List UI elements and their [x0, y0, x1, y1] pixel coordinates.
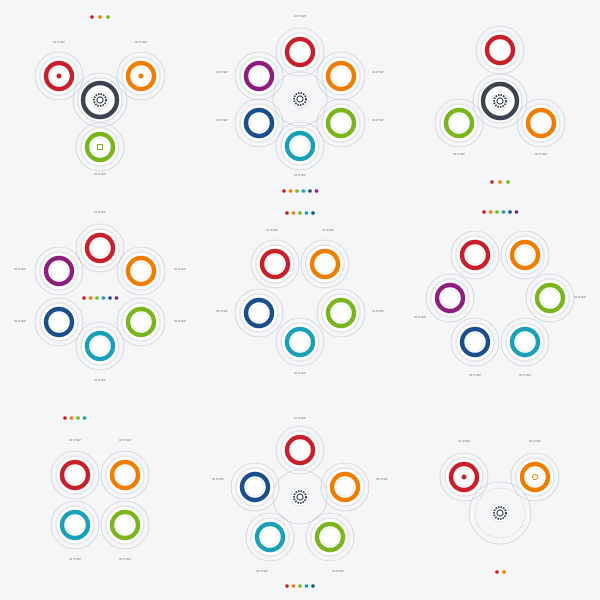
- labels: 06 STEP: [216, 70, 228, 74]
- labels: [212, 416, 388, 573]
- panel: five steps with gear: [212, 416, 388, 588]
- legend dots: [63, 416, 86, 420]
- labels: 01 STEP: [69, 438, 81, 442]
- nodes: [235, 28, 365, 170]
- labels: 04 STEP: [294, 371, 306, 375]
- labels: 03 STEP: [94, 172, 106, 176]
- labels: 02 STEP: [135, 40, 147, 44]
- labels: 04 STEP: [519, 373, 531, 377]
- panel: four steps: [51, 416, 149, 561]
- panel: six steps with gear: [216, 14, 384, 193]
- labels: [53, 40, 147, 176]
- labels: 02 STEP: [529, 439, 541, 443]
- panel: six steps ring: [14, 210, 186, 382]
- legend dots: [495, 570, 506, 574]
- labels: [414, 295, 586, 377]
- labels: 04 STEP: [69, 557, 81, 561]
- labels: [69, 438, 131, 561]
- labels: 02 STEP: [376, 477, 388, 481]
- gear hub: [73, 73, 127, 127]
- nodes: [435, 26, 565, 147]
- labels: 05 STEP: [469, 373, 481, 377]
- labels: [14, 210, 186, 382]
- legend dots: [285, 211, 315, 215]
- labels: 05 STEP: [216, 118, 228, 122]
- labels: 02 STEP: [119, 438, 131, 442]
- labels: [216, 14, 384, 177]
- gear hub: [273, 72, 327, 126]
- labels: 03 STEP: [372, 118, 384, 122]
- gear hub: [273, 470, 327, 524]
- labels: 03 STEP: [453, 152, 465, 156]
- labels: 01 STEP: [294, 416, 306, 420]
- node red: [35, 52, 83, 100]
- panel: three steps triangle: [435, 26, 565, 184]
- labels: 02 STEP: [322, 228, 334, 232]
- legend dots: [282, 189, 318, 193]
- panel: six steps wide: [414, 210, 586, 377]
- labels: 06 STEP: [414, 315, 426, 319]
- labels: 01 STEP: [294, 14, 306, 18]
- labels: 01 STEP: [266, 228, 278, 232]
- labels: 03 STEP: [119, 557, 131, 561]
- labels: [458, 439, 541, 443]
- labels: 04 STEP: [256, 569, 268, 573]
- gear hub: [469, 482, 531, 544]
- labels: 03 STEP: [332, 569, 344, 573]
- labels: 03 STEP: [174, 319, 186, 323]
- labels: 01 STEP: [53, 40, 65, 44]
- labels: 02 STEP: [372, 70, 384, 74]
- labels: [216, 228, 384, 375]
- labels: 03 STEP: [372, 309, 384, 313]
- node green: [76, 123, 124, 171]
- labels: 05 STEP: [216, 309, 228, 313]
- node orange: [117, 52, 165, 100]
- labels: 05 STEP: [14, 319, 26, 323]
- panel: five steps: [216, 211, 384, 375]
- labels: 06 STEP: [14, 267, 26, 271]
- legend dots: [490, 180, 510, 184]
- labels: 03 STEP: [574, 295, 586, 299]
- labels: 04 STEP: [294, 173, 306, 177]
- panel: three steps with gear: [35, 15, 165, 176]
- panel: two steps with gear: [440, 439, 559, 574]
- labels: 05 STEP: [212, 477, 224, 481]
- labels: 01 STEP: [458, 439, 470, 443]
- legend dots: [90, 15, 110, 19]
- labels: 04 STEP: [94, 378, 106, 382]
- labels: 02 STEP: [535, 152, 547, 156]
- labels: 01 STEP: [94, 210, 106, 214]
- legend dots: [482, 210, 518, 214]
- labels: [453, 152, 547, 156]
- labels: 02 STEP: [174, 267, 186, 271]
- gear hub: [473, 74, 527, 128]
- legend dots: [82, 296, 118, 300]
- legend dots: [285, 584, 315, 588]
